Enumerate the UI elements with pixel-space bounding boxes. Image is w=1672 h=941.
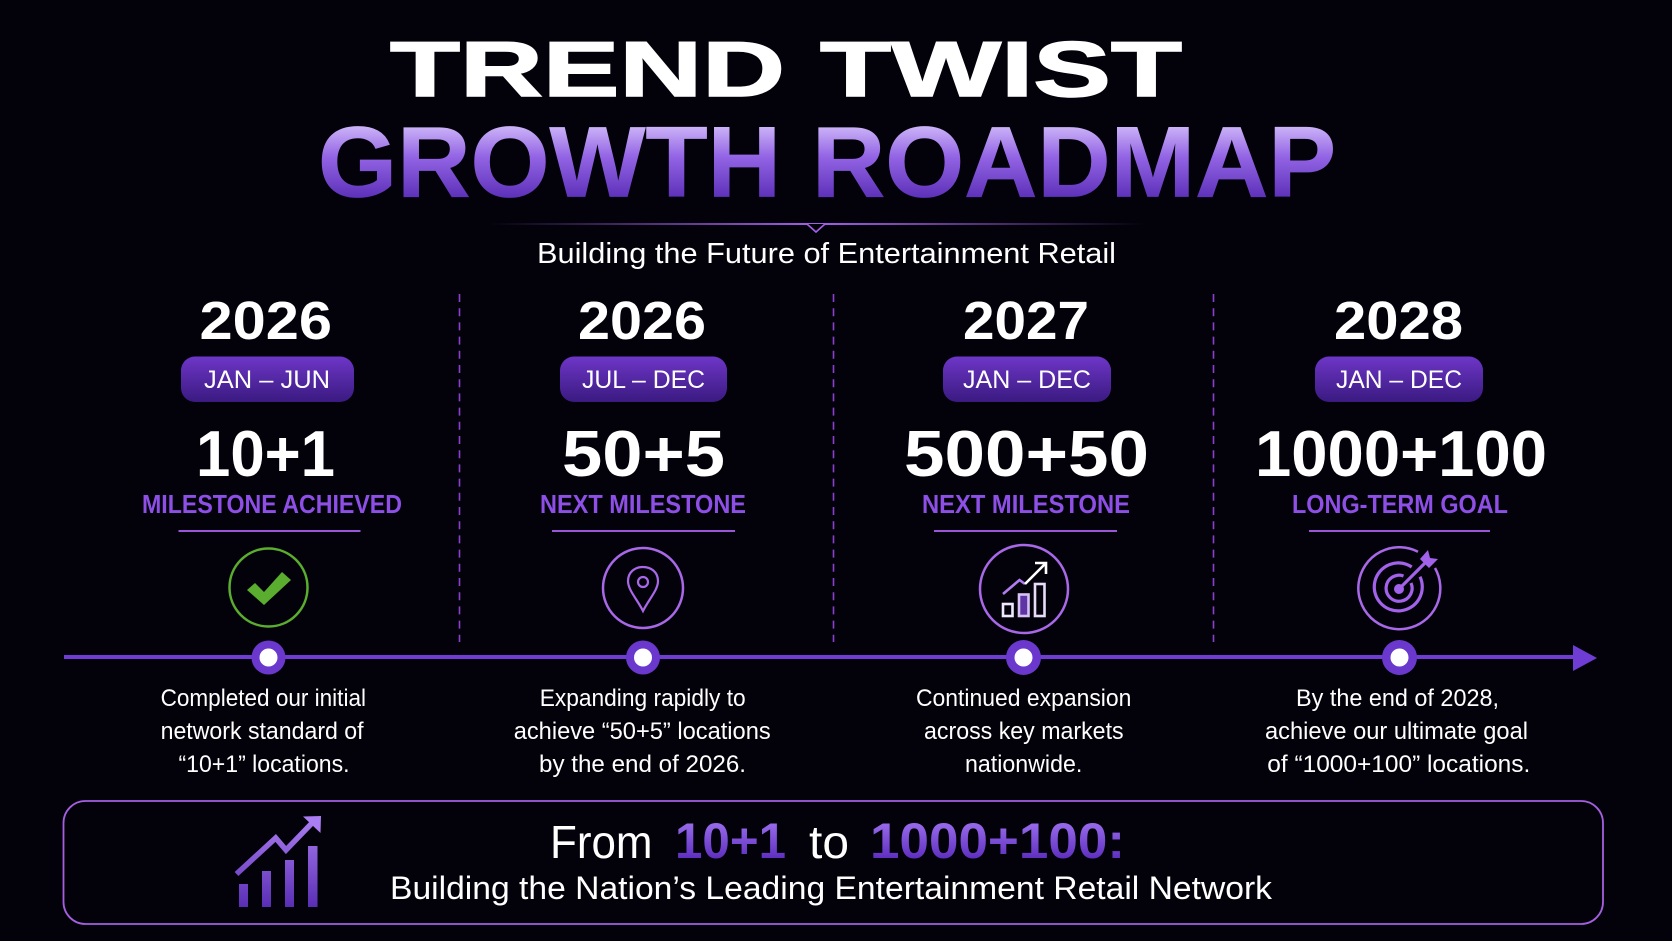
- period pill: [943, 356, 1111, 402]
- period pill: [560, 356, 727, 402]
- description: of “1000+100” locations.: [1267, 751, 1530, 778]
- location count: 50+5: [562, 417, 725, 490]
- description: Completed our initial: [161, 685, 366, 712]
- location count: 500+50: [904, 417, 1149, 490]
- description: [514, 685, 771, 778]
- headline: 10+1: [675, 813, 786, 869]
- period pill: JAN – JUN: [204, 366, 330, 394]
- status label: MILESTONE ACHIEVED: [142, 489, 402, 519]
- headline: [550, 813, 1125, 869]
- heading: Growth Roadmap: GROWTH: [318, 106, 781, 218]
- description: [161, 685, 366, 778]
- location count: 1000+100: [1255, 417, 1547, 490]
- description: [1265, 685, 1530, 778]
- status label: NEXT MILESTONE: [922, 489, 1130, 519]
- year: 2026: [200, 291, 332, 351]
- year: 2026: [578, 291, 706, 351]
- headline: 1000+100:: [870, 813, 1125, 869]
- period pill: [1315, 356, 1483, 402]
- period pill: [181, 356, 354, 402]
- description: [916, 685, 1131, 778]
- heading: Growth Roadmap: [318, 106, 1336, 218]
- period pill: JAN – DEC: [963, 366, 1091, 394]
- panel: bottom summary: [64, 801, 1603, 924]
- headline: to: [809, 816, 849, 868]
- timeline arrow with nodes: [64, 640, 1597, 675]
- description: Expanding rapidly to: [540, 685, 746, 712]
- panel: 2028 Jan-Dec: [1255, 291, 1547, 778]
- status label: LONG-TERM GOAL: [1292, 489, 1508, 519]
- description: nationwide.: [965, 751, 1082, 778]
- headline: From: [550, 816, 652, 868]
- description: network standard of: [161, 718, 364, 745]
- panel: 2027 Jan-Dec: [904, 291, 1149, 778]
- title divider with notch: [489, 223, 1145, 232]
- description: across key markets: [924, 718, 1124, 745]
- description: achieve our ultimate goal: [1265, 718, 1528, 745]
- description: By the end of 2028,: [1296, 685, 1499, 712]
- title: Trend Twist: [390, 25, 1182, 113]
- status label: NEXT MILESTONE: [540, 489, 746, 519]
- year: 2028: [1334, 291, 1463, 351]
- icon: location pin: [603, 548, 683, 628]
- description: Continued expansion: [916, 685, 1131, 712]
- description: by the end of 2026.: [539, 751, 746, 778]
- title: Trend Twist: TWIST: [820, 25, 1182, 113]
- location count: 10+1: [196, 417, 335, 490]
- icon: green check: [230, 548, 308, 626]
- description: “10+1” locations.: [178, 751, 350, 778]
- icon: growth chart: [980, 545, 1068, 633]
- period pill: JUL – DEC: [582, 366, 705, 394]
- heading: Growth Roadmap: ROADMAP: [812, 106, 1336, 218]
- description: achieve “50+5” locations: [514, 718, 771, 745]
- title: Trend Twist: TREND: [390, 25, 785, 113]
- icon: target with arrow: [1358, 547, 1440, 629]
- subtitle: Building the Future of Entertainment Retail: [537, 238, 1116, 270]
- icon: growth bars with arrow: [236, 816, 321, 907]
- year: 2027: [963, 291, 1089, 351]
- panel: 2026 Jul-Dec: [514, 291, 771, 778]
- panel: 2026 Jan-Jun: [142, 291, 402, 778]
- summary line: Building the Nation’s Leading Entertainment Retail Network: [390, 870, 1273, 906]
- period pill: JAN – DEC: [1336, 366, 1462, 394]
